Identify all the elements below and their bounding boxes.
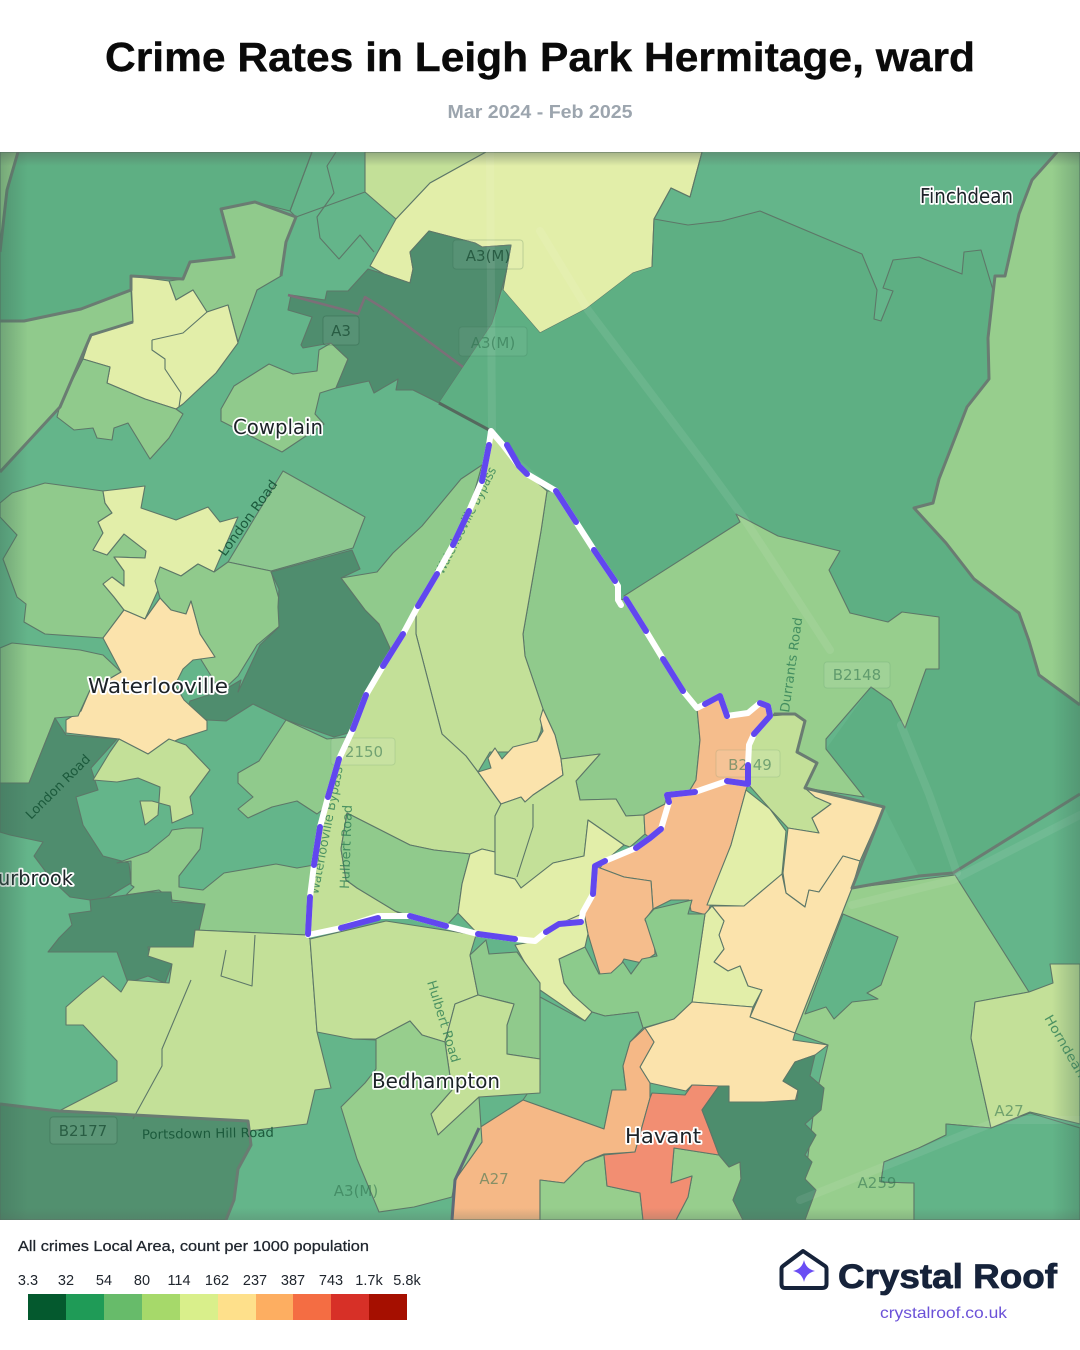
map areas: crime-rate polygons [0, 152, 1080, 1220]
website link: crystalroof.co.uk [880, 1305, 1008, 1322]
legend [18, 1239, 421, 1320]
road labels and shields: Hulbert Road [423, 979, 462, 1064]
road labels and shields: London Road [23, 752, 94, 823]
logo: Crystal Roof [782, 1251, 1058, 1322]
legend colour scale [28, 1294, 407, 1320]
legend labels: 32 [58, 1273, 74, 1289]
town labels [0, 184, 1013, 1148]
road labels and shields: A3 [331, 322, 351, 340]
legend labels [18, 1273, 421, 1289]
road labels and shields: 2150 [345, 743, 383, 761]
choropleth map [0, 152, 1080, 1220]
road labels and shields [23, 240, 1080, 1200]
thin internal ward lines [133, 152, 993, 1119]
road labels and shields: Waterlooville Bypass [307, 765, 347, 896]
road labels and shields: Portsdown Hill Road [142, 1126, 274, 1143]
legend labels: 5.8k [393, 1273, 421, 1289]
town labels: Havant [625, 1124, 701, 1148]
icon: house with star [782, 1251, 826, 1288]
legend labels: 237 [243, 1273, 267, 1289]
subtitle: date range: Mar 2024 - Feb 2025 [448, 102, 632, 122]
road labels and shields: A3(M) [334, 1182, 378, 1200]
heavy district boundaries [0, 152, 1080, 1220]
legend labels: 54 [96, 1273, 112, 1289]
road labels and shields: B2177 [59, 1122, 107, 1140]
road labels and shields: B2148 [833, 666, 881, 684]
legend title: All crimes Local Area, count per 1000 population [18, 1239, 369, 1255]
road labels and shields: Waterlooville Bypass [433, 465, 500, 577]
legend labels: 114 [167, 1273, 191, 1289]
road labels and shields: Durrants Road [778, 616, 806, 714]
town labels: Cowplain [233, 415, 323, 439]
road labels and shields: London Road [216, 478, 281, 559]
major road: A3(M) [490, 152, 1080, 1200]
road labels and shields: A27 [994, 1102, 1024, 1120]
legend labels: 162 [205, 1273, 229, 1289]
logo wordmark: Crystal Roof [838, 1258, 1058, 1296]
road labels and shields: A259 [858, 1174, 896, 1192]
town labels: Waterlooville [88, 674, 228, 698]
town labels: Bedhampton [372, 1069, 500, 1093]
legend labels: 3.3 [18, 1273, 38, 1289]
legend labels: 743 [319, 1273, 343, 1289]
legend labels: 387 [281, 1273, 305, 1289]
road labels and shields: A3(M) [466, 247, 510, 265]
road labels and shields: B2 49 [728, 756, 772, 774]
legend labels: 80 [134, 1273, 150, 1289]
road labels and shields: A3(M) [471, 334, 515, 352]
town labels: Finchdean [920, 184, 1013, 208]
ward boundary: Leigh Park Hermitage [308, 431, 770, 941]
title: Crime Rates in Leigh Park Hermitage, ward [105, 34, 975, 80]
road labels and shields: A27 [479, 1170, 509, 1188]
legend labels: 1.7k [355, 1273, 383, 1289]
town labels: urbrook [0, 866, 73, 890]
road labels and shields: Hulbert Road [338, 805, 356, 889]
